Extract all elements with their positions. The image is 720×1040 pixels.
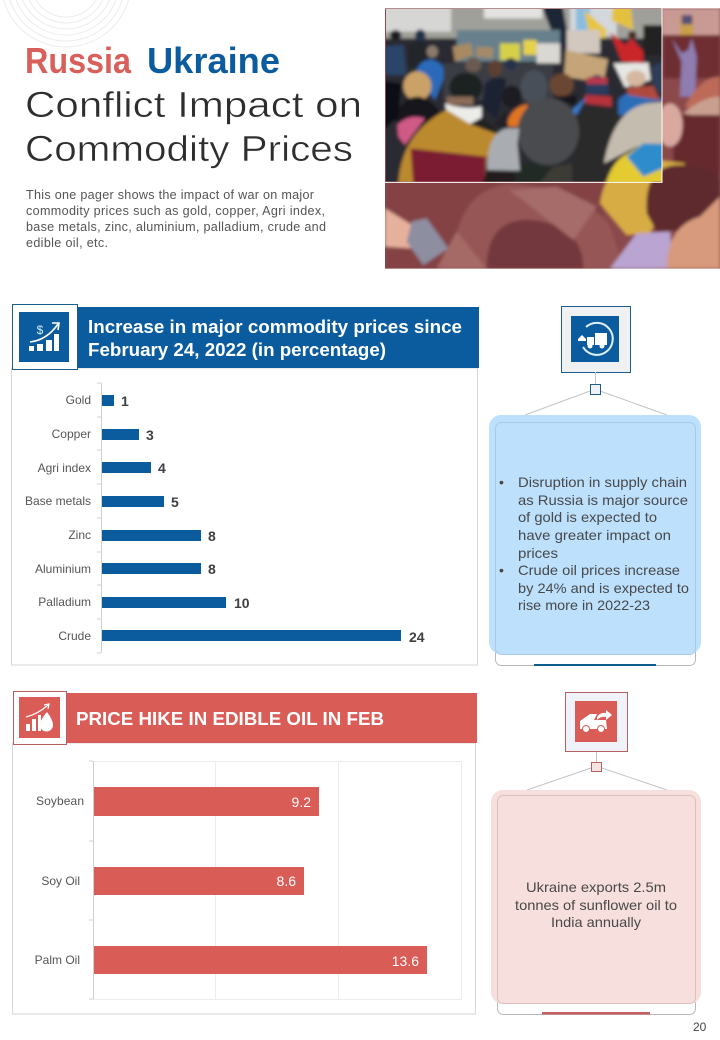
bar chart: commodity increases: 5: [171, 494, 179, 510]
crowd left: [380, 45, 407, 75]
bar chart: commodity increases: Zinc: [68, 528, 91, 542]
bar chart: commodity increases: Gold: [66, 393, 91, 407]
bar chart: commodity increases: Aluminium: [35, 562, 91, 576]
title: Conflict Impact on: [25, 84, 362, 125]
title: [25, 40, 362, 169]
striped beanie figure: [586, 75, 608, 95]
headscarf and yellow-blue flag coat: [604, 102, 667, 163]
chart panel frame: [12, 743, 476, 1014]
pink jacket: [397, 117, 425, 145]
dark cap: [449, 73, 483, 102]
bar chart: edible oil prices: Palm Oil: [35, 953, 80, 967]
photo white frame: [385, 8, 662, 182]
bar chart: commodity increases: 1: [121, 393, 129, 409]
callout bullets: have greater impact on: [518, 527, 671, 543]
page number: 20: [693, 1020, 707, 1034]
callout bullets: of gold is expected to: [518, 509, 657, 525]
photo: crowd at rally: [380, 0, 720, 273]
callout card: [489, 415, 701, 666]
callout text: India annually: [551, 914, 641, 930]
decorative concentric rings: [1, 0, 131, 47]
bar chart: commodity increases: Palladium: [38, 595, 91, 609]
intro text: commodity prices such as gold, copper, Agri index,: [26, 204, 325, 218]
icon: truck with cycle arrow: [562, 306, 630, 372]
callout bullets: by 24% and is expected to: [518, 580, 689, 596]
bar chart: edible oil prices: 8.6: [277, 873, 296, 889]
intro text: edible oil, etc.: [26, 236, 108, 250]
light grey hat: [487, 128, 520, 171]
bar chart: commodity increases: 10: [234, 595, 250, 611]
bar chart: edible oil prices: 9.2: [292, 794, 311, 810]
icon: oil drop with rising chart: [14, 692, 66, 744]
bar chart: edible oil prices: 13.6: [392, 953, 419, 969]
bar chart: commodity increases: [25, 383, 425, 653]
header banner: commodity prices: [45, 307, 479, 368]
blond head: [403, 71, 431, 101]
callout bullets: •: [499, 474, 504, 490]
mustard jacket: [398, 110, 497, 187]
bar chart: commodity increases: 4: [158, 460, 166, 476]
callout bullets: [499, 474, 689, 613]
panel: sunflower oil callout: [491, 692, 701, 1014]
callout bullets: Crude oil prices increase: [518, 562, 680, 578]
hooded figures: [521, 70, 547, 105]
bar chart: commodity increases: 8: [208, 528, 216, 544]
icon: tow truck with arrow: [566, 692, 628, 752]
header banner: edible oil: [40, 693, 477, 743]
big grey beanie: [517, 164, 550, 182]
red jacket figure: [610, 32, 643, 63]
bar chart: commodity increases: Base metals: [25, 494, 91, 508]
header banner: edible oil: PRICE HIKE IN EDIBLE OIL IN FEB: [76, 709, 384, 729]
chart panel frame: [12, 368, 478, 665]
bar chart: commodity increases: 3: [146, 427, 154, 443]
bar chart: commodity increases: 8: [208, 561, 216, 577]
bar chart: edible oil prices: Soy Oil: [41, 874, 80, 888]
callout bullets: •: [499, 562, 504, 578]
intro text: This one pager shows the impact of war on major: [26, 188, 314, 202]
callout text: Ukraine exports 2.5m: [526, 879, 666, 895]
callout bullets: rise more in 2022-23: [518, 597, 650, 613]
icon: rising dollar chart: [12, 304, 78, 370]
panel: edible oil chart: [12, 692, 477, 1014]
title: Ukraine: [147, 40, 280, 81]
callout card: [491, 790, 701, 1014]
header banner: commodity prices: February 24, 2022 (in percentage): [88, 339, 386, 360]
callout bullets: Disruption in supply chain: [518, 474, 687, 490]
icon: rising dollar chart: $: [37, 323, 44, 337]
bar chart: commodity increases: Crude: [58, 629, 91, 643]
callout text: [515, 879, 677, 930]
bar chart: edible oil prices: [35, 761, 462, 1000]
bar chart: commodity increases: 24: [409, 629, 425, 645]
title: Russia: [25, 40, 132, 81]
photo main sharp area: [386, 9, 662, 182]
dark coat: [572, 106, 623, 187]
bar chart: commodity increases: Copper: [52, 427, 91, 441]
photo tinted background: [380, 3, 720, 273]
bar chart: edible oil prices: Soybean: [36, 794, 84, 808]
bar chart: commodity increases: Agri index: [38, 461, 91, 475]
title: Commodity Prices: [25, 128, 353, 169]
blue jacket right: [618, 91, 667, 115]
callout text: tonnes of sunflower oil to: [515, 897, 677, 913]
intro text: base metals, zinc, aluminium, palladium, crude and: [26, 220, 326, 234]
intro text: [26, 188, 326, 250]
header banner: commodity prices: Increase in major commodity prices since: [88, 316, 462, 337]
callout bullets: prices: [518, 545, 558, 561]
callout bullets: as Russia is major source: [518, 492, 688, 508]
panel: supply chain callout: [489, 306, 701, 666]
panel: commodity price chart: [12, 304, 479, 665]
